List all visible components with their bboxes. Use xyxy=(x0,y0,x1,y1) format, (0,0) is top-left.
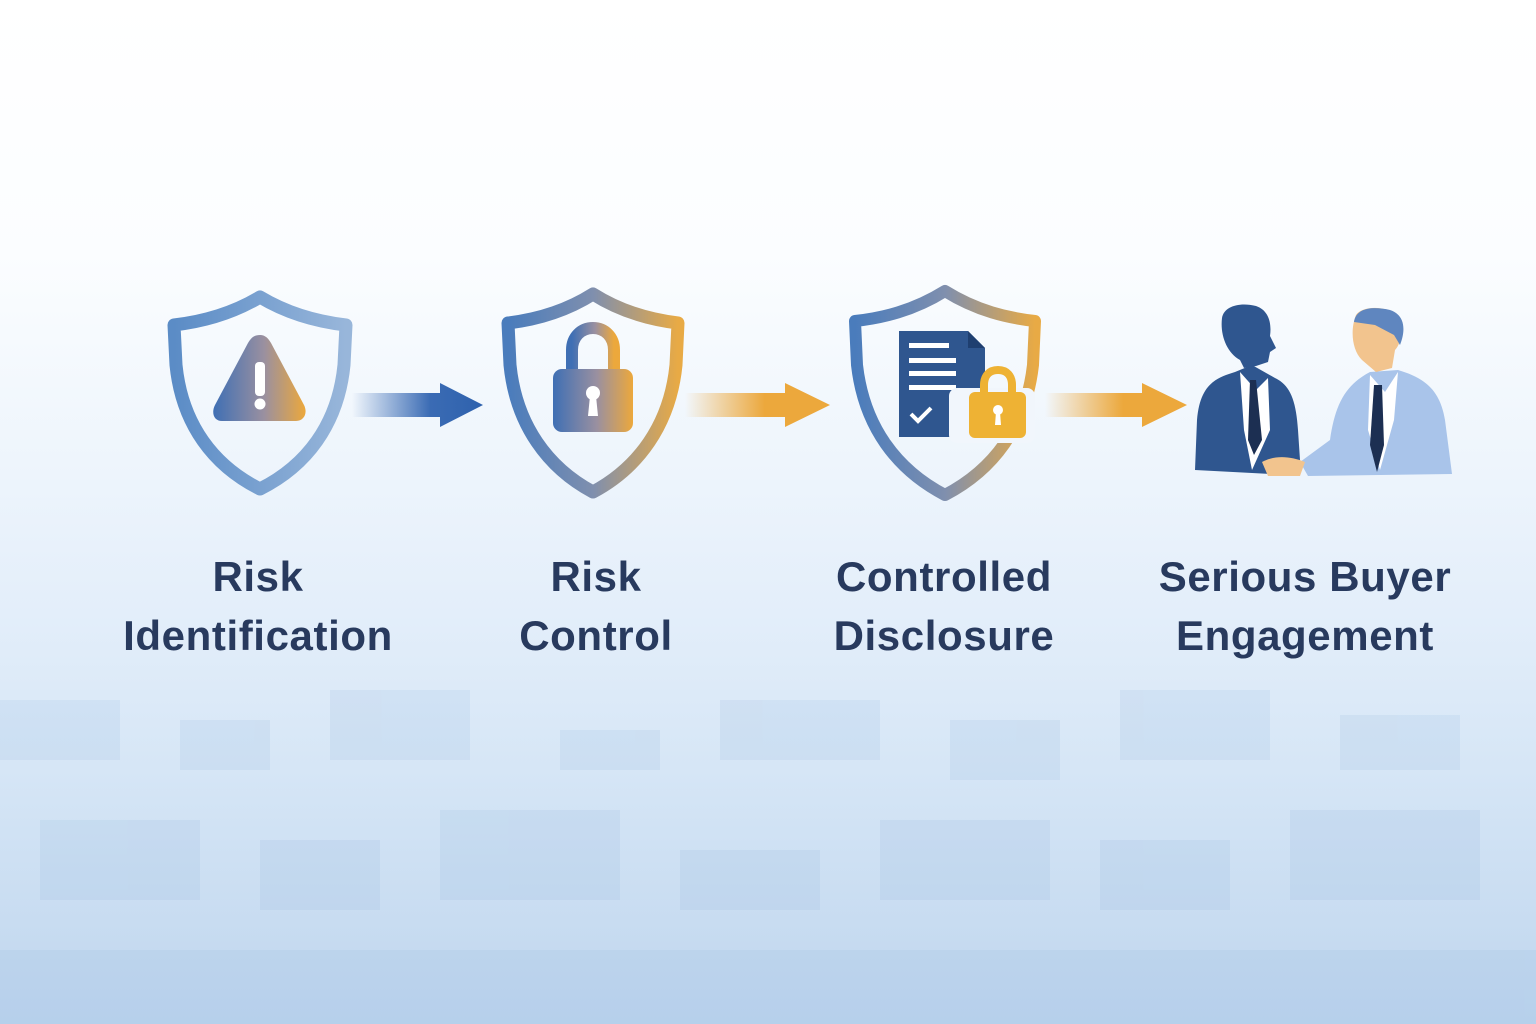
icon: shield risk control xyxy=(508,294,678,492)
background city pattern xyxy=(0,690,1536,1024)
label: Risk Control: Risk xyxy=(550,553,642,600)
icon: shield controlled disclosure xyxy=(855,291,1035,495)
label: Risk Identification: Risk xyxy=(212,553,304,600)
label: Controlled Disclosure xyxy=(834,553,1054,659)
icon: padlock xyxy=(553,328,633,432)
label: Controlled Disclosure: Disclosure xyxy=(834,612,1054,659)
icon: lock xyxy=(949,370,1035,443)
arrow 1 xyxy=(352,383,483,427)
label: Risk Control: Control xyxy=(519,612,673,659)
label: Risk Identification xyxy=(123,553,393,659)
arrow 2 xyxy=(685,383,830,427)
arrow 3 xyxy=(1045,383,1187,427)
icon: shield risk identification xyxy=(174,297,346,489)
icon: warning triangle xyxy=(213,335,306,421)
label: Controlled Disclosure: Controlled xyxy=(836,553,1052,600)
label: Risk Identification: Identification xyxy=(123,612,393,659)
label: Serious Buyer Engagement: Engagement xyxy=(1176,612,1434,659)
dark man xyxy=(1195,365,1300,475)
label: Serious Buyer Engagement: Serious Buyer xyxy=(1159,553,1451,600)
icon: document xyxy=(899,331,985,437)
icon: handshake people xyxy=(1195,304,1452,476)
label: Serious Buyer Engagement xyxy=(1159,553,1451,659)
label: Risk Control xyxy=(519,553,673,659)
light man xyxy=(1300,370,1452,476)
